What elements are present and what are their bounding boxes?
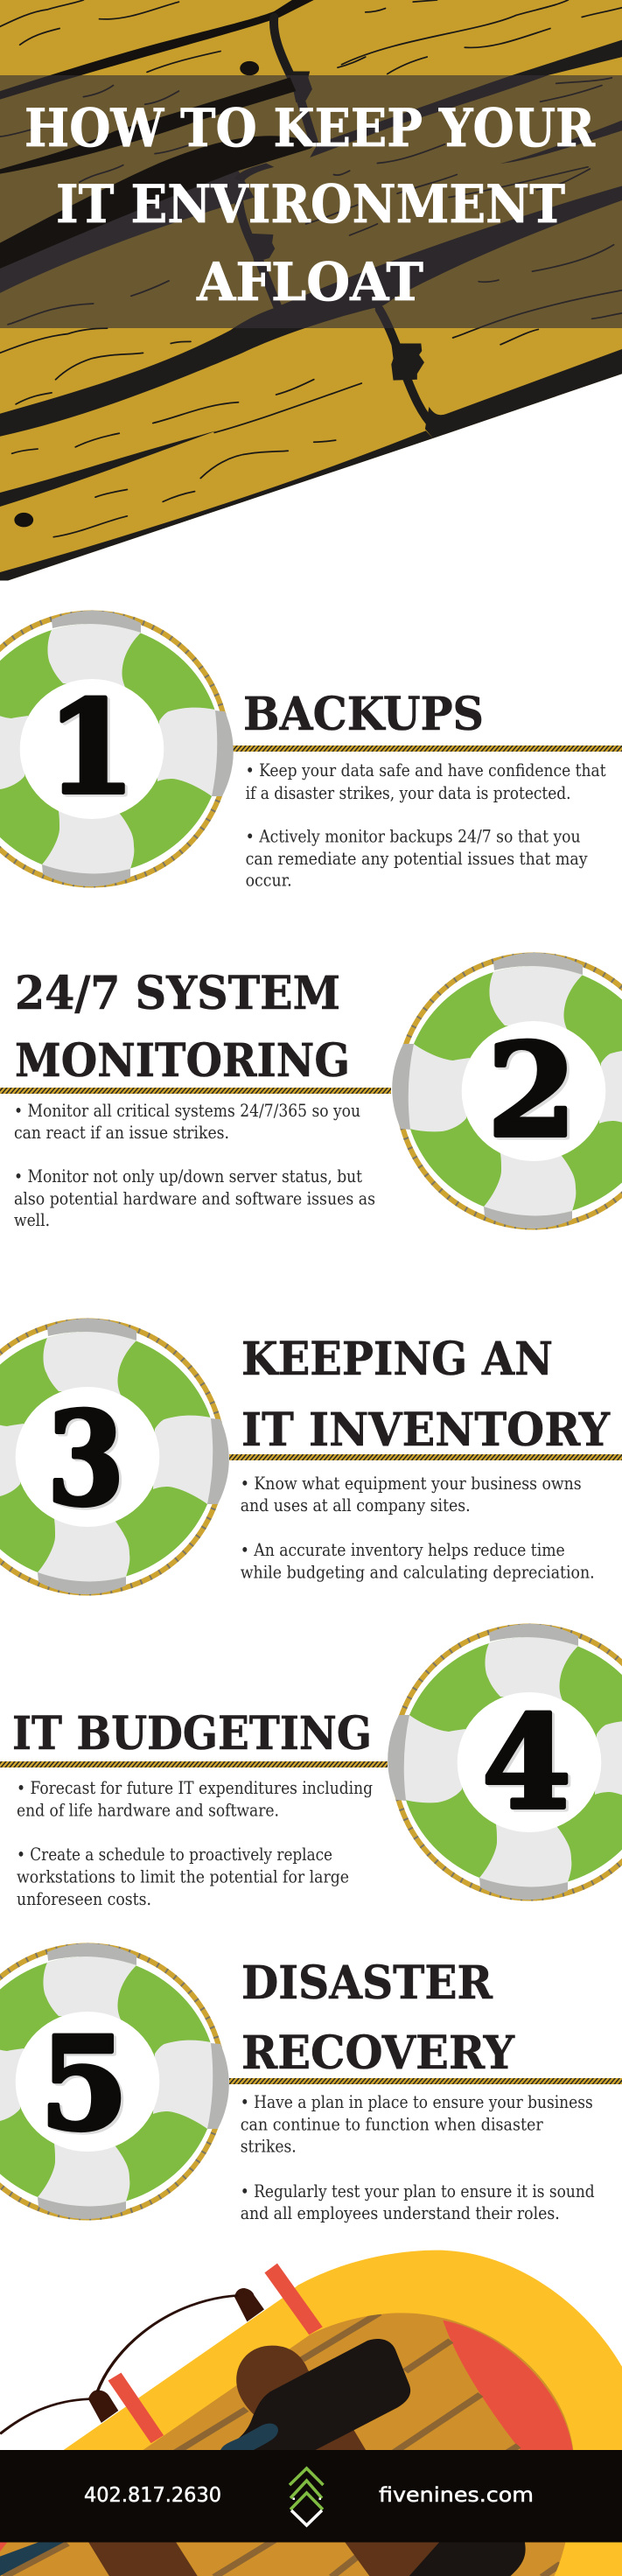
rope divider: section 3 — [229, 1454, 622, 1460]
body text: budgeting: workstations to limit the potential for large — [17, 1866, 349, 1886]
body text: inventory: • An accurate inventory helps reduce time — [241, 1539, 565, 1560]
number 3: 3 — [50, 1387, 127, 1536]
heading: keeping an it inventory — [241, 1333, 611, 1457]
body text: inventory — [241, 1473, 595, 1582]
number 1: 1 — [46, 674, 136, 822]
black plank gaps over band — [0, 77, 318, 269]
rope divider: section 1 — [233, 746, 622, 752]
body text: budgeting: unforeseen costs. — [17, 1888, 151, 1909]
number 4: 4 — [485, 1690, 574, 1840]
title — [24, 98, 596, 313]
footer website: fivenines.com — [379, 2484, 534, 2507]
body text: backups: occur. — [246, 870, 292, 891]
rope divider: section 4 — [0, 1761, 388, 1768]
body text: budgeting — [17, 1777, 373, 1909]
title: IT ENVIRONMENT — [56, 174, 565, 235]
life ring 5 — [0, 1943, 229, 2219]
body text: budgeting: • Create a schedule to proactively replace — [17, 1844, 332, 1865]
number 1: 1 — [49, 676, 138, 825]
body text: monitoring: • Monitor not only up/down server status, but — [14, 1166, 362, 1186]
heading: 24/7 system monitoring: 24/7 SYSTEM — [15, 967, 340, 1020]
title: AFLOAT — [196, 252, 423, 313]
header illustration: wooden planks — [0, 0, 622, 581]
life ring 4 — [388, 1624, 622, 1900]
body text: backups: if a disaster strikes, your data is protected. — [246, 782, 571, 803]
heading: it budgeting: IT BUDGETING — [12, 1707, 372, 1760]
body text: monitoring: can react if an issue strikes. — [14, 1122, 229, 1143]
boat illustration — [0, 2250, 622, 2576]
body text: monitoring: also potential hardware and software issues as — [14, 1188, 375, 1209]
body text: budgeting: end of life hardware and software. — [17, 1799, 279, 1820]
icon: five nines logo — [290, 2468, 324, 2525]
footer phone number: 402.817.2630 — [84, 2484, 221, 2507]
body text: disaster recovery: and all employees understand their roles. — [241, 2202, 560, 2223]
number 5: 5 — [39, 2009, 129, 2160]
number 4: 4 — [482, 1689, 571, 1838]
heading: keeping an it inventory: KEEPING AN — [241, 1333, 553, 1386]
footer bar — [0, 2450, 622, 2543]
rope divider: section 5 — [229, 2078, 622, 2084]
number 2: 2 — [487, 1017, 577, 1166]
life ring 2 — [392, 953, 622, 1228]
heading: 24/7 system monitoring: MONITORING — [15, 1034, 350, 1088]
body text: budgeting: • Forecast for future IT expenditures including — [17, 1777, 373, 1798]
heading: backups: BACKUPS — [243, 688, 484, 741]
number 2: 2 — [490, 1018, 579, 1168]
body text: monitoring: • Monitor all critical systems 24/7/365 so you — [14, 1100, 360, 1121]
body text: backups — [246, 760, 606, 891]
heading: disaster recovery — [241, 1956, 515, 2080]
heading: keeping an it inventory: IT INVENTORY — [241, 1404, 611, 1457]
body text: monitoring — [14, 1100, 375, 1230]
body text: disaster recovery: strikes. — [241, 2135, 297, 2156]
body text: monitoring: well. — [14, 1209, 50, 1230]
life ring 3 — [0, 1319, 229, 1594]
title band overlay — [0, 75, 622, 328]
life ring 1 — [0, 611, 234, 886]
heading: 24/7 system monitoring — [15, 967, 350, 1088]
heading: disaster recovery: DISASTER — [241, 1956, 493, 2010]
rope divider: section 2 — [0, 1088, 391, 1094]
body text: inventory: and uses at all company sites. — [241, 1494, 471, 1516]
body text: disaster recovery: can continue to function when disaster — [241, 2114, 543, 2135]
heading: disaster recovery: RECOVERY — [241, 2026, 515, 2080]
number 3: 3 — [47, 1384, 124, 1535]
number 5: 5 — [42, 2012, 131, 2161]
body text: disaster recovery — [241, 2091, 595, 2223]
